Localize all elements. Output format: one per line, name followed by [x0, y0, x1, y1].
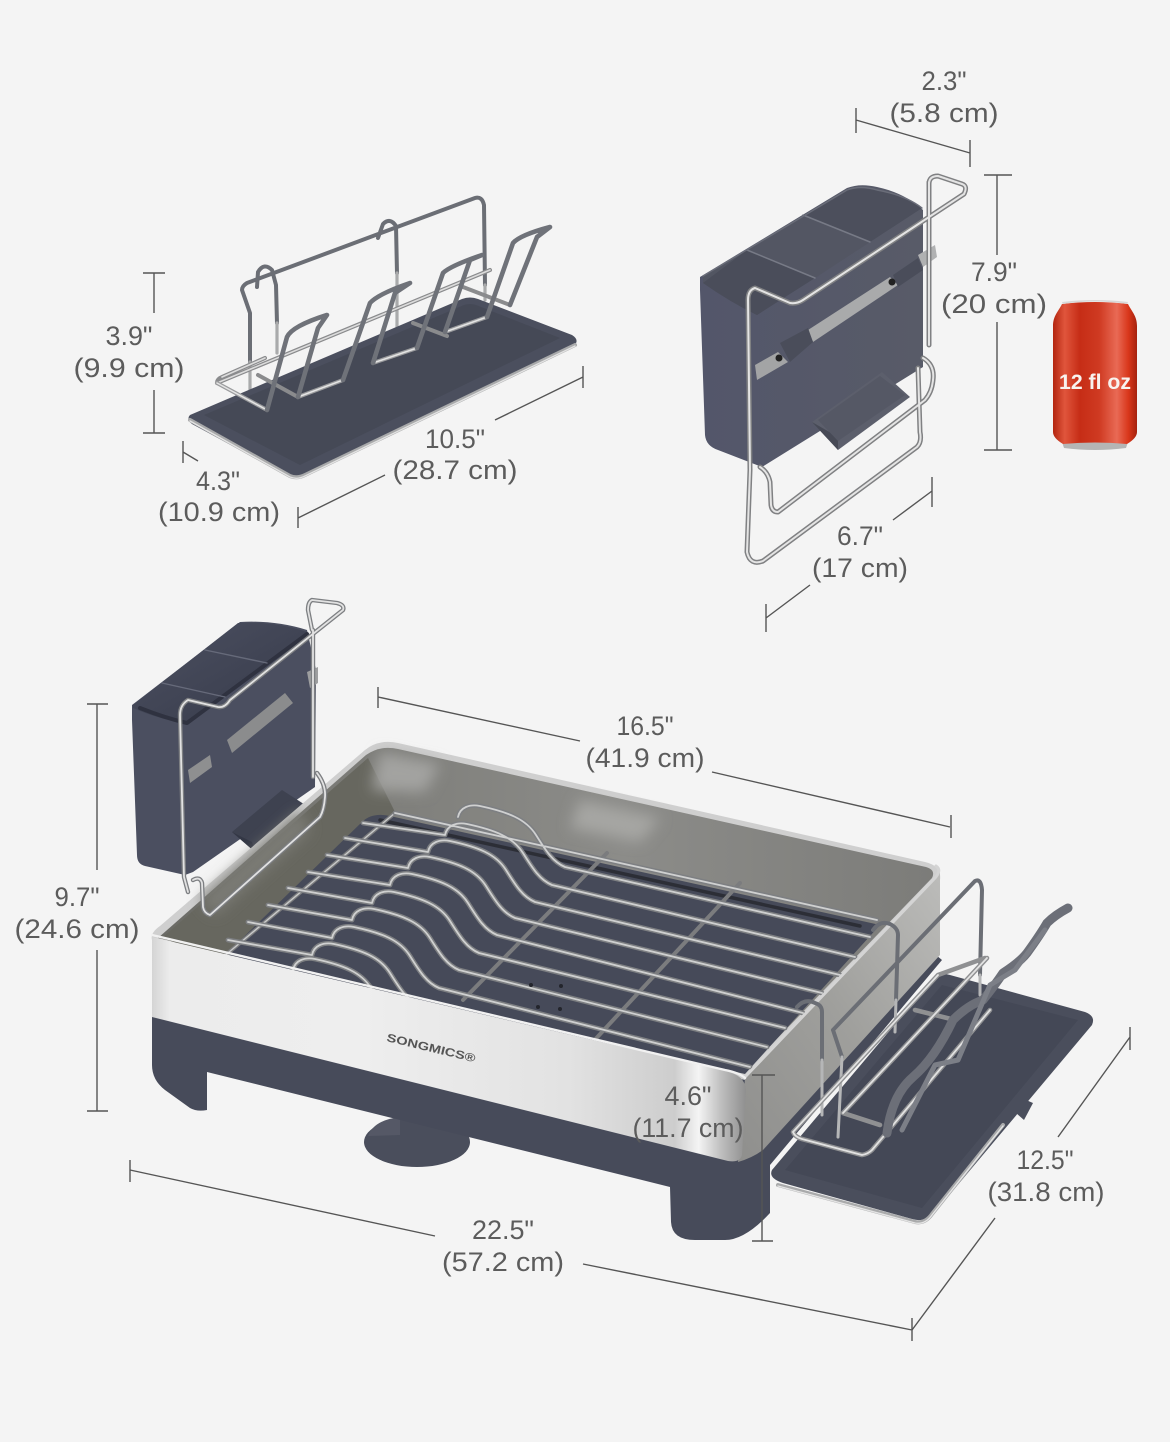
dimension: holder width 2.3 [856, 66, 998, 167]
dimension: holder height 7.9 [941, 175, 1047, 450]
tray [188, 298, 577, 478]
dimension: tray depth 4.3 [158, 441, 280, 527]
dimension: basket height 4.6: (11.7 cm) [632, 1113, 744, 1143]
utensil holder body [132, 622, 318, 875]
strips and soap tray [188, 667, 318, 852]
dimension: basket length 16.5: (41.9 cm) [586, 743, 704, 773]
side rack frame and hooks [797, 880, 982, 1137]
dimension: basket height 4.6 [632, 1075, 775, 1241]
front steel face [152, 937, 746, 1161]
side rack fingers [887, 908, 1068, 1133]
dimension: tray height 3.9 [74, 273, 184, 433]
dimension: total width 12.5: 12.5" [1016, 1145, 1074, 1175]
dimension: total height 9.7: 9.7" [54, 882, 100, 912]
tub floor [222, 815, 880, 1074]
dimension: tray height 3.9: 3.9" [106, 321, 152, 351]
steel wire frame [747, 176, 966, 562]
right steel face [738, 872, 940, 1162]
product: small tray with glass rack [188, 198, 577, 478]
drain holes [529, 983, 563, 1011]
dimension: holder height 7.9: (20 cm) [941, 289, 1047, 319]
dimension: holder width 2.3: (5.8 cm) [890, 98, 998, 128]
dimension: total height 9.7: (24.6 cm) [14, 914, 140, 944]
tub inner walls [158, 748, 933, 1072]
holder wire frame [180, 600, 343, 915]
side rack base wires [793, 958, 990, 1155]
dimension: basket length 16.5: 16.5" [616, 711, 674, 741]
dimension: holder length 6.7: (17 cm) [812, 553, 908, 583]
holder opening [703, 188, 922, 315]
side tray [771, 974, 1093, 1223]
suction disc [364, 1117, 470, 1167]
dimension: tray length 10.5: (28.7 cm) [392, 455, 518, 485]
silver strips and clips [755, 245, 937, 380]
dimension: basket height 4.6: 4.6" [664, 1081, 712, 1111]
plate wires [228, 805, 877, 1067]
soap tray [812, 372, 910, 450]
cross wires [222, 813, 740, 1045]
dimension: tray depth 4.3: (10.9 cm) [158, 497, 280, 527]
dimension: tray length 10.5 [298, 366, 583, 528]
base [152, 950, 942, 1240]
dimension: total width 12.5 [912, 1027, 1130, 1330]
can label: 12 fl oz [1059, 371, 1131, 394]
dimension: total height 9.7 [14, 704, 140, 1111]
dimension: total length 22.5 [130, 1160, 912, 1341]
dimension: holder width 2.3: 2.3" [922, 66, 966, 96]
dimension: holder length 6.7: 6.7" [837, 521, 883, 551]
tub rim [152, 742, 940, 1080]
side rack [793, 880, 1068, 1155]
wire rack [222, 805, 877, 1067]
dimension: holder height 7.9: 7.9" [971, 257, 1017, 287]
dimension: total width 12.5: (31.8 cm) [988, 1177, 1104, 1207]
brand: SONGMICS® [385, 1032, 477, 1065]
can lid [1062, 300, 1128, 304]
main product: dish rack [132, 600, 1093, 1240]
product: utensil holder [700, 176, 966, 562]
holder body [700, 185, 923, 467]
rack frame and hooks [242, 198, 485, 393]
dimension: total length 22.5: (57.2 cm) [442, 1247, 564, 1277]
dimension: basket length 16.5 [378, 687, 951, 838]
can body [1053, 302, 1137, 444]
dimension: tray length 10.5: 10.5" [425, 424, 485, 454]
dimension: holder length 6.7 [766, 477, 932, 632]
dimension: tray depth 4.3: 4.3" [196, 466, 240, 496]
dimension: tray height 3.9: (9.9 cm) [74, 353, 184, 383]
front rim [152, 935, 745, 1078]
wire shadow [380, 820, 860, 926]
rack wires [217, 227, 550, 410]
dimension: total length 22.5: 22.5" [472, 1215, 534, 1245]
right rim [745, 866, 939, 1077]
can bottom [1060, 436, 1130, 450]
soda can for scale [1053, 300, 1137, 450]
